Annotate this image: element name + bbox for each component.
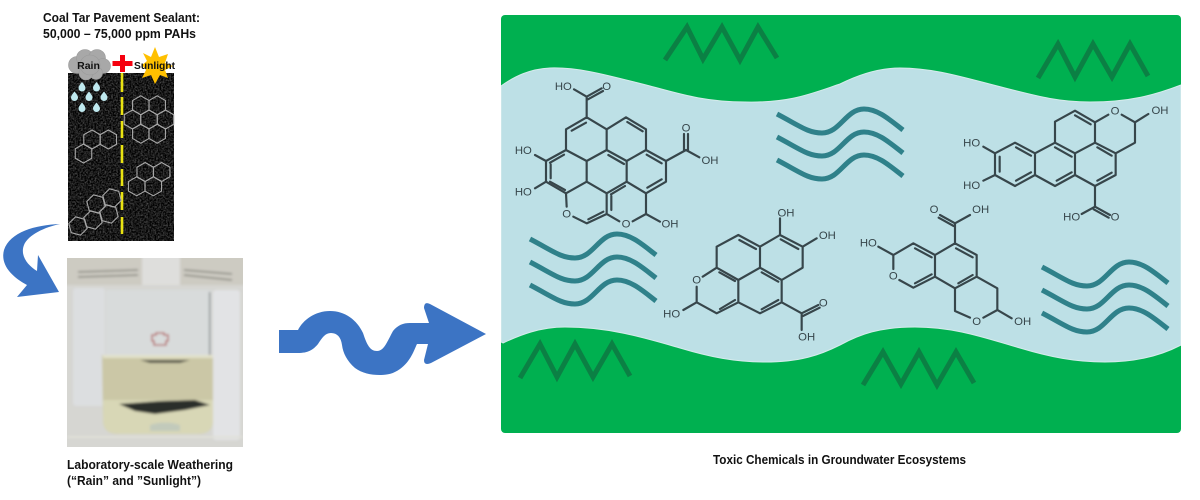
molecule: centre right: O <box>972 316 981 328</box>
molecule: top left: O <box>622 218 631 230</box>
icon: sediment zigzag bottom left <box>520 344 630 378</box>
molecule: top left: HO <box>515 187 532 199</box>
molecule: pyrene outline <box>128 162 170 196</box>
heading: coal tar pavement sealant: 50,000 – 75,000 ppm PAHs <box>43 27 196 41</box>
icon: rain cloud: Rain <box>77 60 100 72</box>
heading: coal tar pavement sealant <box>43 11 200 41</box>
molecule: centre right: OH <box>972 204 989 216</box>
sediment background <box>501 15 1181 433</box>
molecule: centre <box>663 207 836 344</box>
molecule: top right: HO <box>963 138 980 150</box>
molecule: phenanthrene outline <box>75 130 117 163</box>
molecule: top right <box>963 105 1168 224</box>
molecule: top right: O <box>1111 105 1120 117</box>
molecule: top left: OH <box>701 155 718 167</box>
molecule: top right: O <box>1111 212 1120 224</box>
molecule: top left: O <box>682 123 691 135</box>
molecule: centre right: OH <box>1014 316 1031 328</box>
road centre dashed line <box>121 73 123 234</box>
molecule: top left: O <box>562 208 571 220</box>
icon: rain cloud <box>68 50 110 80</box>
molecule: centre right <box>860 204 1031 328</box>
molecule: centre: O <box>692 275 701 287</box>
molecule: centre: HO <box>663 308 680 320</box>
panel: pavement with PAHs <box>68 73 174 241</box>
icon: sediment zigzag top left <box>665 27 777 60</box>
water band <box>501 68 1181 362</box>
molecule: top left: O <box>602 81 611 93</box>
icon: sun with label <box>134 47 175 84</box>
molecule: top right: HO <box>963 180 980 192</box>
molecule: centre: OH <box>819 230 836 242</box>
molecule: centre right: HO <box>860 238 877 250</box>
molecule: top right: HO <box>1063 212 1080 224</box>
molecule: top right: OH <box>1151 105 1168 117</box>
molecule: coronene outline <box>124 96 174 143</box>
molecule: benzopyrene outline <box>68 187 122 237</box>
molecule: top left: OH <box>661 218 678 230</box>
caption: laboratory-scale weathering: Laboratory-scale Weathering <box>67 458 233 472</box>
caption: laboratory-scale weathering <box>67 458 233 488</box>
photo: laboratory jar <box>67 258 243 447</box>
panel: groundwater ecosystem <box>501 15 1181 433</box>
icon: sediment zigzag bottom centre <box>863 352 974 385</box>
icon: water waves top centre <box>777 109 903 179</box>
molecule: centre: OH <box>798 332 815 344</box>
icon: sediment zigzag top right <box>1038 44 1148 78</box>
icon: rain drops <box>71 82 108 112</box>
molecule: centre right: O <box>889 271 898 283</box>
molecule: top left: HO <box>555 81 572 93</box>
heading: coal tar pavement sealant: Coal Tar Pavement Sealant: <box>43 11 200 25</box>
molecule: centre: O <box>819 297 828 309</box>
icon: sun with label: Sunlight <box>134 60 175 72</box>
molecule: centre right: O <box>930 204 939 216</box>
arrow: curved from pavement to jar <box>3 224 60 297</box>
molecule: top left <box>515 81 718 230</box>
molecule: centre: OH <box>777 207 794 219</box>
caption: toxic chemicals in groundwater ecosystems: Toxic Chemicals in Groundwater Ecosystems <box>713 453 966 467</box>
icon: red plus <box>112 55 132 72</box>
icon: water waves right <box>1042 262 1168 332</box>
arrow: wavy towards groundwater <box>279 303 486 375</box>
caption: laboratory-scale weathering: (“Rain” and ”Sunlight”) <box>67 474 201 488</box>
molecule: top left: HO <box>515 145 532 157</box>
icon: water waves left <box>530 234 656 304</box>
